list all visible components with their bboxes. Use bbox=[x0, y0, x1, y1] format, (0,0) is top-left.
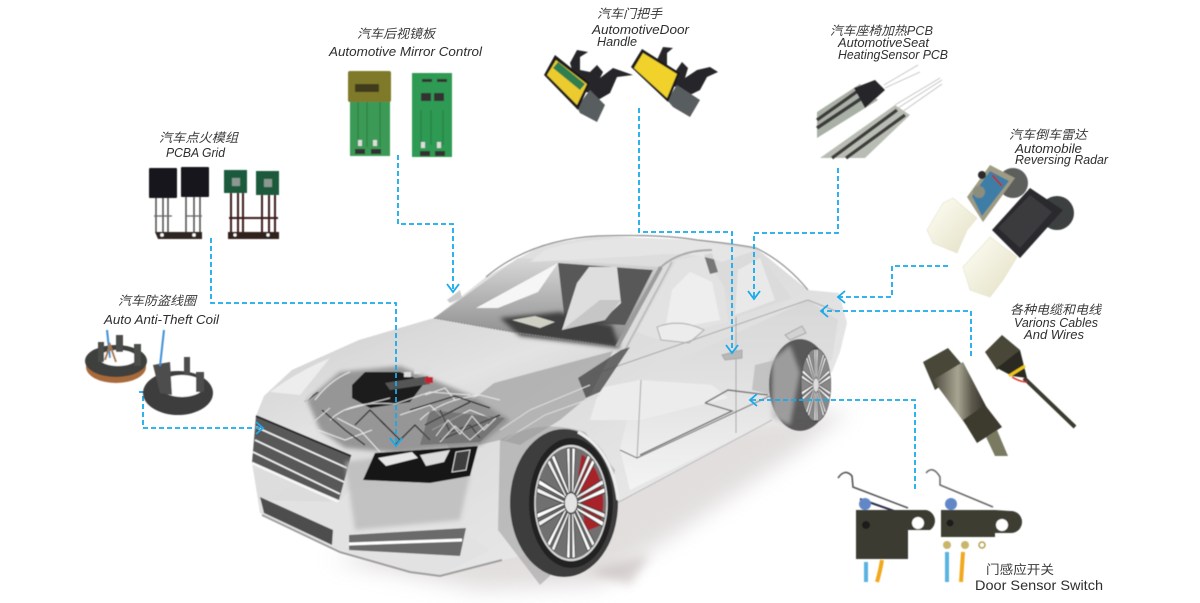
interior and windows bbox=[434, 236, 808, 350]
heading: 汽车防盗线圈 bbox=[118, 294, 198, 308]
group: anti-theft coil bbox=[85, 294, 220, 415]
small connector bbox=[985, 335, 1075, 427]
heading: AutomotiveDoor bbox=[591, 23, 690, 37]
heading: AutomotiveSeat bbox=[837, 36, 930, 50]
heading: Door Sensor Switch bbox=[975, 577, 1103, 593]
coil right bbox=[143, 330, 213, 415]
heading: Varions Cables bbox=[1014, 316, 1098, 330]
car body silhouette bbox=[252, 236, 847, 576]
engine bay bbox=[300, 366, 600, 453]
car illustration bbox=[252, 236, 850, 590]
translucent cabin floor bbox=[590, 380, 728, 420]
arrow: cables bbox=[821, 305, 971, 356]
arrow: coil to grille bbox=[139, 392, 263, 434]
front wheel bbox=[498, 427, 618, 585]
radar sensor open bbox=[927, 165, 1028, 253]
heading bbox=[328, 27, 483, 59]
heading: Handle bbox=[597, 35, 637, 49]
door panels bbox=[620, 300, 838, 490]
ground shadow bbox=[330, 410, 850, 590]
group: door sensor switch bbox=[838, 470, 1103, 593]
sensor strips bbox=[817, 65, 942, 158]
heading: And Wires bbox=[1023, 328, 1084, 342]
rear heater detail bbox=[752, 360, 775, 395]
group: cables bbox=[923, 303, 1103, 456]
arrow: reversing radar bbox=[838, 266, 948, 303]
grille bbox=[252, 416, 351, 502]
arrow: door handle bbox=[639, 108, 738, 353]
heading: Reversing Radar bbox=[1015, 153, 1109, 167]
arrow: seat heating bbox=[748, 168, 838, 299]
heading: Auto Anti-Theft Coil bbox=[103, 313, 220, 327]
black modules with lead frame bbox=[149, 167, 209, 239]
heading: Automobile bbox=[1014, 142, 1082, 156]
arrow: mirror control to mirror bbox=[398, 155, 459, 292]
heading bbox=[591, 7, 690, 49]
rear seats bbox=[665, 272, 720, 330]
front seat bbox=[562, 267, 621, 330]
group: reversing radar bbox=[927, 128, 1109, 297]
group: door handle bbox=[544, 7, 718, 122]
switch right bbox=[926, 470, 1022, 582]
heading: 汽车座椅加热PCB bbox=[830, 24, 933, 38]
headlight bbox=[363, 446, 478, 483]
handle left bbox=[544, 50, 633, 122]
heading: 门感应开关 bbox=[986, 562, 1054, 577]
heading bbox=[1010, 303, 1103, 342]
heading bbox=[975, 562, 1103, 593]
wiper and cowl bbox=[578, 347, 630, 398]
heading: 各种电缆和电线 bbox=[1010, 303, 1103, 317]
radar sensor closed bbox=[963, 188, 1074, 297]
body lines bbox=[589, 300, 838, 503]
heading bbox=[1009, 128, 1109, 167]
group: PCBA grid bbox=[149, 131, 279, 239]
group: seat heating PCB bbox=[817, 24, 948, 158]
heading: 汽车点火模组 bbox=[159, 131, 240, 145]
heading: Automotive Mirror Control bbox=[328, 45, 483, 59]
green boards with copper frame bbox=[224, 170, 279, 239]
coil left bbox=[85, 330, 147, 383]
rear wheel bbox=[769, 339, 831, 431]
arrow: door switch bbox=[750, 394, 915, 489]
switch left bbox=[838, 472, 935, 582]
bumper bbox=[258, 480, 490, 576]
flow arrows bbox=[139, 108, 971, 489]
arrow: PCBA grid to engine bbox=[211, 238, 402, 446]
board: green bbox=[412, 73, 452, 157]
handle right bbox=[631, 47, 718, 117]
large connector bbox=[923, 348, 1008, 456]
heading bbox=[103, 294, 220, 327]
hood bbox=[256, 318, 617, 456]
heading: 汽车倒车雷达 bbox=[1009, 128, 1089, 142]
heading: 汽车门把手 bbox=[597, 7, 664, 21]
heading: PCBA Grid bbox=[166, 146, 226, 160]
lower vents bbox=[260, 497, 502, 576]
heading: HeatingSensor PCB bbox=[838, 48, 948, 62]
side mirror bbox=[657, 323, 704, 343]
heading: 汽车后视镜板 bbox=[357, 27, 437, 41]
board: amber coated bbox=[348, 71, 391, 156]
heading bbox=[159, 131, 240, 160]
mirror cap bbox=[447, 290, 462, 303]
heading bbox=[830, 24, 948, 62]
group: mirror control bbox=[328, 27, 483, 157]
under-hood shade bbox=[440, 351, 613, 452]
